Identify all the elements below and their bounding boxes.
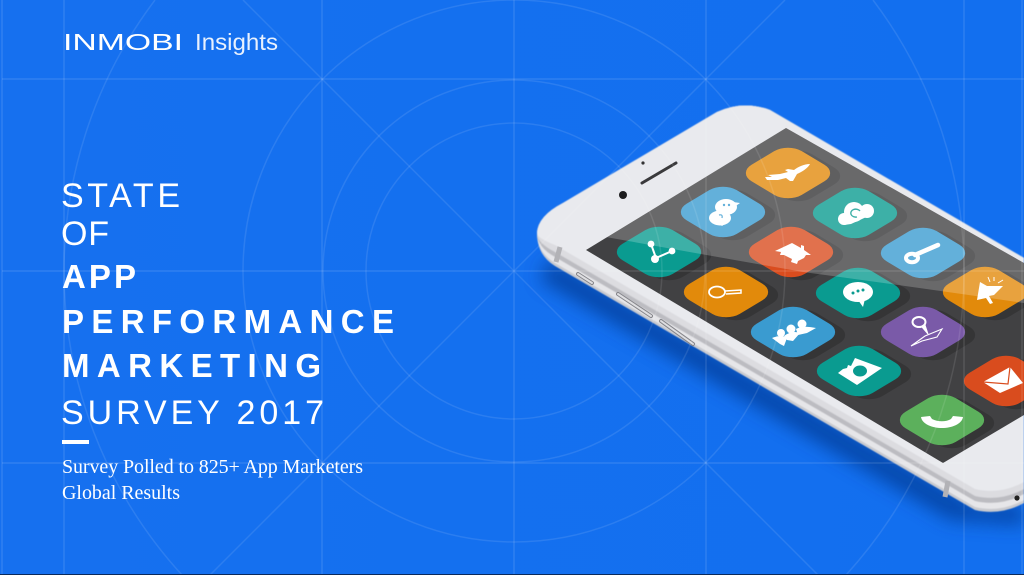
phone body	[537, 105, 1024, 512]
icon: telephone	[892, 390, 992, 450]
bottom edge	[0, 574, 1024, 575]
title: MARKETING: MARKETING	[62, 347, 321, 384]
side buttons	[578, 274, 693, 344]
icon shadows	[619, 146, 1024, 453]
phone shadow	[540, 258, 1024, 525]
icon: question speech bubbles	[673, 182, 773, 242]
icon: share nodes	[609, 222, 709, 282]
title: PERFORMANCE: PERFORMANCE	[62, 303, 394, 340]
icon: envelope	[956, 351, 1024, 411]
logo	[63, 29, 278, 55]
icon: map pin and pen	[873, 302, 973, 362]
icon: plane	[738, 143, 838, 203]
logo: InMobi wordmark: INMOBI	[63, 29, 183, 55]
app icons	[609, 143, 1024, 453]
title: APP: APP	[62, 258, 136, 295]
front camera	[619, 161, 645, 199]
icon: house	[741, 222, 841, 282]
earpiece speaker	[642, 163, 676, 183]
screen	[586, 128, 1024, 463]
logo: Insights: Insights	[195, 29, 278, 55]
subtitle line 2: Global Results	[62, 482, 180, 504]
title: STATE: STATE	[61, 177, 180, 215]
icon: camera	[809, 341, 909, 401]
icon: magnifier	[676, 262, 776, 322]
subtitle	[62, 456, 363, 504]
icon: people	[743, 302, 843, 362]
screen glare	[606, 128, 1024, 303]
title: SURVEY 2017: SURVEY 2017	[61, 394, 324, 432]
title block	[61, 177, 394, 432]
icon: key	[873, 223, 973, 283]
phone	[537, 105, 1024, 525]
antenna bands	[556, 247, 948, 497]
icon: megaphone	[935, 262, 1024, 322]
icon: chat bubble	[808, 263, 908, 323]
icon: cloud	[805, 183, 905, 243]
title: OF: OF	[61, 215, 109, 253]
headphone jack	[1014, 495, 1020, 501]
accent bar	[62, 440, 89, 444]
subtitle line 1: Survey Polled to 825+ App Marketers	[62, 456, 363, 478]
